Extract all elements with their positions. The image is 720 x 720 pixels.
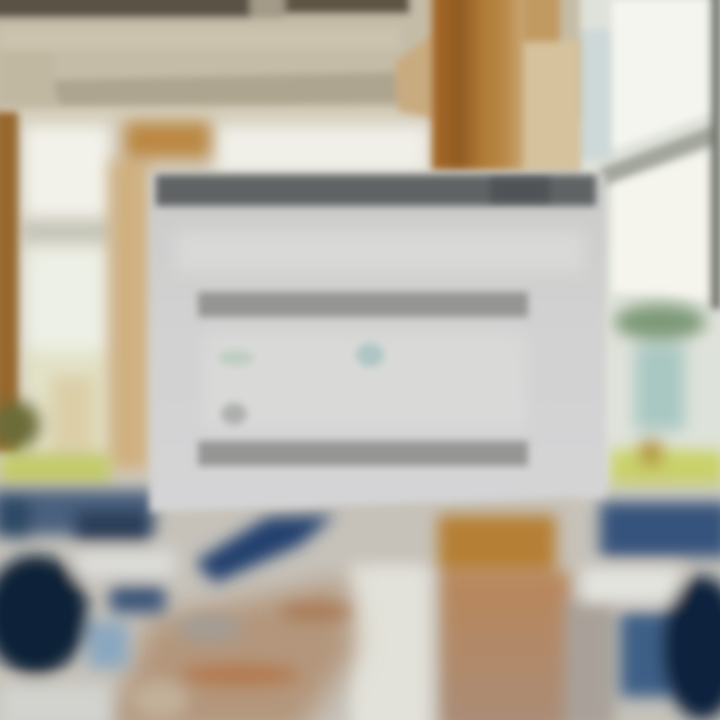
wooden pillar: centre bottom [438, 515, 615, 720]
floor and furniture background [0, 490, 720, 720]
panel body [150, 174, 606, 512]
teal cell [356, 343, 384, 367]
table band upper [198, 292, 528, 317]
floor light reflection [350, 565, 430, 720]
table band lower [198, 441, 528, 466]
right windows [580, 0, 720, 510]
chairs: right group [582, 502, 720, 720]
table rows [205, 335, 525, 427]
green cell [218, 350, 254, 366]
wooden pillar: centre top [432, 0, 580, 170]
panel title bar [156, 175, 596, 206]
chairs: left group [0, 490, 335, 720]
table highlights [132, 603, 351, 720]
plant on left [0, 401, 110, 487]
plant on right [610, 304, 720, 490]
wooden table [105, 580, 355, 720]
header row [175, 232, 585, 272]
left windows [24, 125, 430, 455]
ceiling [0, 0, 720, 122]
small dark cell [221, 403, 247, 425]
title bar highlight [490, 179, 550, 201]
wooden pillar: far left [0, 112, 18, 452]
wooden pillar: left column [110, 122, 210, 470]
panel: spreadsheet window [150, 174, 606, 512]
